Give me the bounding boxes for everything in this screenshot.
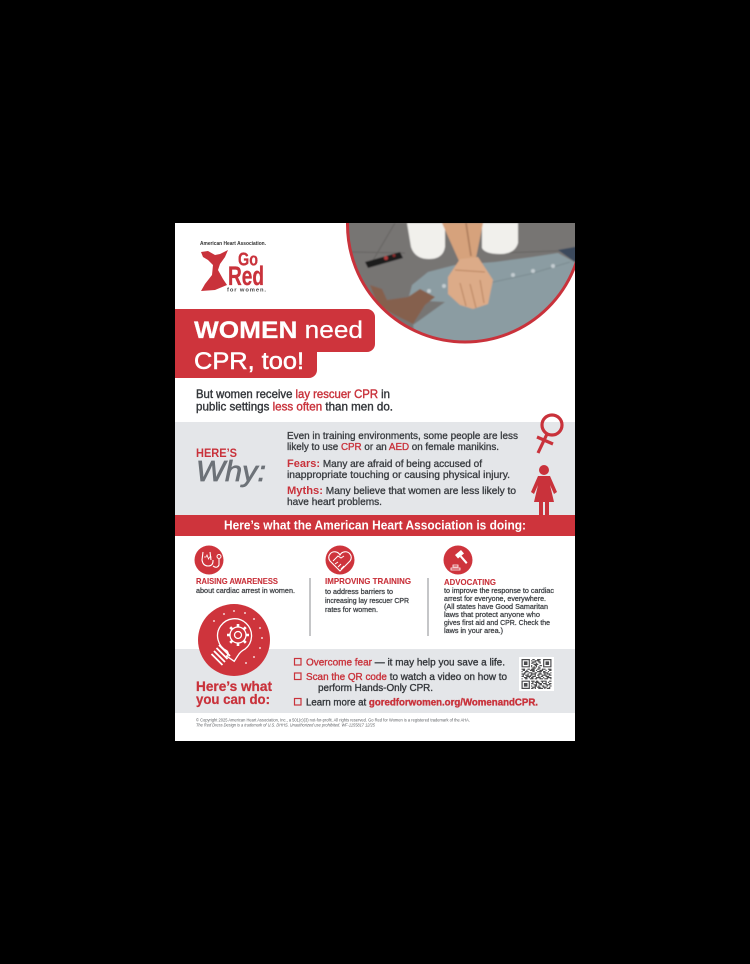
column: advocating: gives first aid and CPR. Check the	[444, 618, 550, 627]
column: advocating: arrest for everyone, everywhere.	[444, 594, 546, 603]
QR code	[519, 657, 554, 691]
column: advocating	[444, 546, 554, 635]
divider	[428, 578, 429, 636]
icon: red dress	[201, 250, 228, 291]
footer: copyright: The Red Dress Design is a trademark of U.S. DHHS. Unauthorized use prohibited. WF-1155817 12/25	[196, 722, 375, 728]
footer: copyright: © Copyright 2025 American Heart Association, Inc., a 501(c)(3) not-for-profit. All rights reserved. Go Red for Women is a registered trademark of the AHA.	[196, 716, 470, 722]
logo: American Heart Association Go Red for Women: Red	[228, 261, 264, 291]
column: raising awareness: RAISING AWARENESS	[196, 576, 278, 586]
photo: hands performing CPR on a manikin	[346, 223, 575, 344]
footer: copyright	[196, 716, 470, 728]
checklist: Scan the QR code to watch a video on how to	[306, 671, 507, 683]
column: improving training: to address barriers to	[325, 587, 393, 596]
divider	[310, 578, 311, 636]
panel: what you can do	[175, 604, 575, 713]
icon: female symbol	[537, 415, 562, 453]
checklist: Learn more at goredforwomen.org/WomenandCPR.	[306, 696, 538, 708]
panel: here's why	[175, 415, 575, 516]
column: improving training: rates for women.	[325, 605, 378, 614]
subheading text: But women receive lay rescuer CPR in	[196, 387, 390, 401]
text block: reasons	[287, 431, 518, 508]
logo: American Heart Association Go Red for Women: American Heart Association.	[200, 241, 266, 247]
column: advocating: laws that protect anyone who	[444, 610, 540, 619]
headline: WOMEN need CPR, too!	[175, 309, 375, 378]
column: advocating: to improve the response to cardiac	[444, 586, 554, 595]
icon: woman figure	[531, 465, 557, 516]
banner: Here's what the American Heart Association is doing	[175, 515, 575, 536]
logo: American Heart Association Go Red for Women: Go	[238, 250, 258, 270]
headline: WOMEN need CPR, too!: CPR, too!	[194, 348, 304, 375]
icon: gavel	[444, 546, 472, 574]
heading: here's what you can do	[196, 679, 273, 707]
checklist: perform Hands-Only CPR.	[318, 682, 433, 694]
heading: here's why: HERE’S	[196, 446, 237, 460]
logo: American Heart Association Go Red for Women	[200, 241, 266, 294]
headline: WOMEN need CPR, too!: WOMEN need	[194, 317, 363, 344]
column: advocating: (All states have Good Samaritan	[444, 602, 548, 611]
heading: here's what you can do: you can do:	[196, 692, 270, 707]
heading: here's what you can do: Here’s what	[196, 679, 273, 694]
icon: lightbulb with gear	[198, 604, 270, 676]
icon: heart handshake	[326, 546, 354, 574]
text block: reasons: Myths: Many believe that women are less likely to	[287, 485, 516, 497]
icon: stethoscope	[194, 546, 224, 574]
page background	[175, 223, 575, 741]
column: advocating: laws in your area.)	[444, 626, 503, 635]
logo: American Heart Association Go Red for Women: for women.	[227, 288, 266, 294]
checklist: Overcome fear — it may help you save a life.	[306, 656, 505, 668]
text block: reasons: inappropriate touching or causing physical injury.	[287, 470, 510, 481]
text block: reasons: Even in training environments, some people are less	[287, 431, 518, 442]
column: improving training: IMPROVING TRAINING	[325, 576, 411, 586]
text block: reasons: likely to use CPR or an AED on female manikins.	[287, 442, 499, 453]
heading: here's why: Why:	[196, 456, 266, 488]
text block: reasons: have heart problems.	[287, 497, 382, 508]
subheading text: public settings less often than men do.	[196, 400, 393, 414]
column: advocating: ADVOCATING	[444, 577, 496, 587]
column: raising awareness	[194, 546, 295, 595]
column: improving training	[325, 546, 411, 614]
column: improving training: increasing lay rescuer CPR	[325, 596, 410, 605]
text block: reasons: Fears: Many are afraid of being accused of	[287, 458, 482, 470]
banner: Here's what the American Heart Association is doing: Here’s what the American Heart Association is doing:	[224, 518, 526, 532]
subheading text	[196, 387, 393, 414]
checklist	[294, 656, 538, 708]
column: raising awareness: about cardiac arrest in women.	[196, 586, 295, 595]
